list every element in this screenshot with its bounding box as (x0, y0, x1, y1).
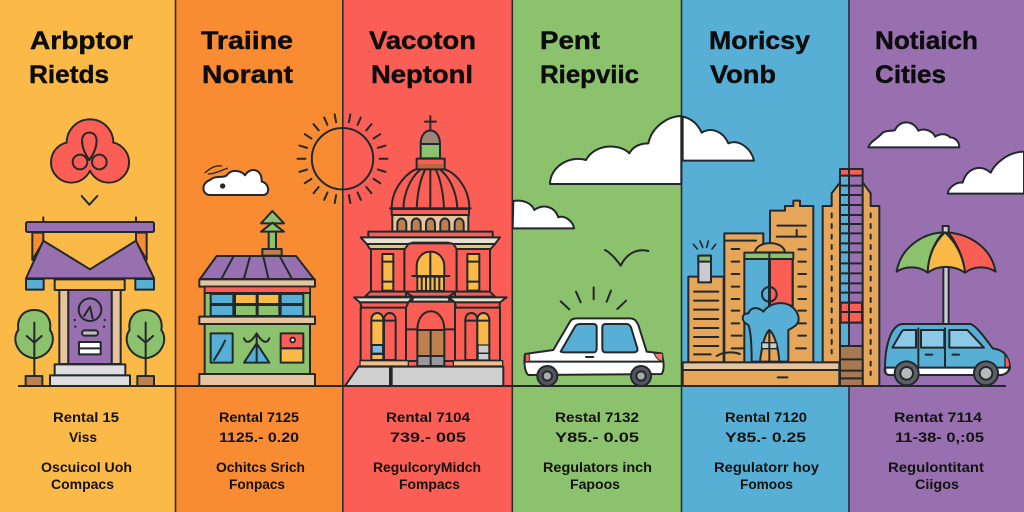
icon: cloud over blue panel (683, 117, 754, 161)
ground line (18, 385, 1006, 387)
text block: panel 4: Fapoos (570, 476, 620, 492)
heading: panel 1 (29, 27, 133, 89)
heading: panel 6 (875, 27, 978, 89)
heading: panel 1: Rietds (29, 61, 109, 89)
text block: panel 3: Rental 7104 (386, 409, 470, 425)
text block: panel 1: Viss (69, 429, 97, 445)
icon: medium cloud (513, 201, 574, 228)
text block: panel 1: Compacs (51, 476, 114, 492)
icon: emphasis rays (561, 287, 626, 309)
heading: panel 2: Traiine (201, 27, 293, 55)
icon: blue car (885, 324, 1010, 385)
heading: panel 3: Vacoton (369, 27, 476, 55)
icon: cloud right of purple panel (948, 152, 1024, 194)
text block: panel 5: Y85.- 0.25 (725, 429, 806, 445)
heading: panel 3 (369, 27, 476, 89)
text block: panel 4: Regulators inch (543, 459, 652, 475)
text block: panel 3: 739.- 005 (390, 429, 466, 445)
text block: panel 6 (888, 409, 984, 492)
text block: panel 1 (41, 409, 132, 492)
text block: panel 6: Ciigos (915, 476, 959, 492)
icon: white car (524, 318, 664, 386)
text block: panel 4: Restal 7132 (555, 409, 639, 425)
heading: panel 2 (201, 27, 294, 89)
text block: panel 4 (543, 409, 652, 492)
gate building (26, 217, 154, 386)
heading: panel 5 (709, 27, 810, 89)
icon: chevron (82, 196, 97, 205)
text block: panel 4: Y85.- 0.05 (555, 429, 639, 445)
text block: panel 2 (216, 409, 305, 492)
text block: panel 5: Regulatorr hoy (714, 459, 819, 475)
icon: umbrella (897, 226, 996, 324)
text block: panel 6: 11-38- 0,:05 (895, 429, 984, 445)
heading: panel 1: Arbptor (30, 27, 133, 55)
icon: right tree (127, 310, 164, 386)
text block: panel 2: 1125.- 0.20 (219, 429, 299, 445)
heading: panel 4: Riepviic (540, 61, 639, 89)
text block: panel 5 (714, 409, 819, 492)
icon: large cloud (550, 116, 681, 184)
house with purple roof (199, 211, 315, 386)
text block: panel 6: Rentat 7114 (894, 409, 982, 425)
heading: panel 4 (540, 27, 639, 89)
illustration group: panels 3 and 4 (345, 116, 681, 386)
icon: small cloud (203, 166, 268, 195)
text block: panel 1: Rental 15 (53, 409, 119, 425)
text block: panel 3: RegulcoryMidch (373, 459, 481, 475)
heading: panel 6: Cities (875, 61, 946, 89)
icon: left tree (15, 310, 53, 386)
heading: panel 5: Moricsy (709, 27, 810, 55)
heading: panel 2: Norant (202, 61, 294, 89)
icon: sun (298, 114, 388, 203)
heading: panel 3: Neptonl (371, 61, 473, 89)
icon: red clover badge (51, 119, 129, 183)
illustration group: panels 1 and 2 (15, 119, 315, 386)
text block: panel 5: Fomoos (740, 476, 793, 492)
text block: panel 2: Ochitcs Srich (216, 459, 305, 475)
heading: panel 5: Vonb (710, 61, 776, 89)
icon: bird (605, 250, 648, 266)
text block: panel 5: Rental 7120 (725, 409, 807, 425)
heading: panel 6: Notiaich (875, 27, 978, 55)
text block: panel 2: Rental 7125 (219, 409, 299, 425)
illustration group: panels 5 and 6 (683, 117, 1024, 386)
text block: panel 6: Regulontitant (888, 459, 984, 475)
icon: cloud top of purple panel (868, 122, 959, 147)
heading: panel 4: Pent (540, 27, 601, 55)
text block: panel 3 (373, 409, 481, 492)
text block: panel 2: Fonpacs (229, 476, 285, 492)
text block: panel 1: Oscuicol Uoh (41, 459, 132, 475)
domed civic building (345, 116, 507, 386)
city skyline (683, 169, 879, 386)
text block: panel 3: Fompacs (399, 476, 460, 492)
